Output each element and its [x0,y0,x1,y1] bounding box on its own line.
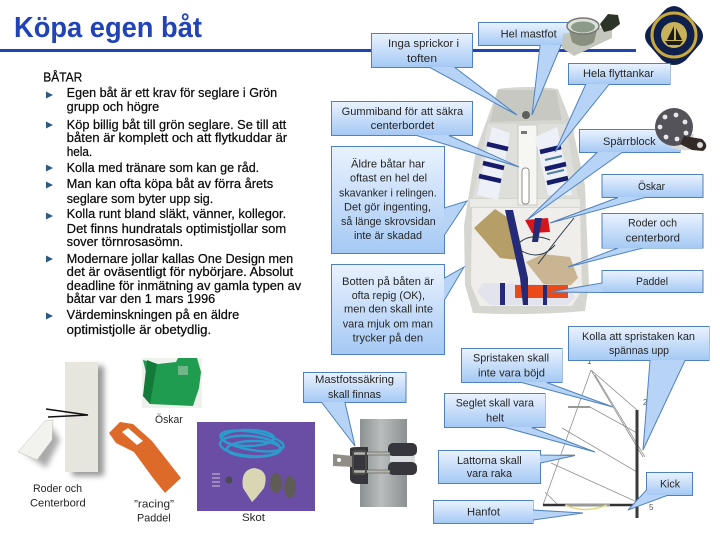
callout: Inga sprickor i toften: Inga sprickor i [388,38,459,50]
heading: BÅTAR [43,70,82,84]
caption: Öskar: Öskar [155,414,183,426]
bullet text: Värdeminskningen på en äldre [67,308,239,322]
callout: Spärrblock: Spärrblock [603,136,656,148]
callout: Inga sprickor i toften: toften [407,53,437,65]
left flotation bag [477,127,510,200]
caption: Skot: Skot [242,512,265,524]
caption: racing Paddel: ”racing” [134,499,174,511]
bullet text: hela. [67,145,92,159]
text block: BÅTAR [43,70,302,337]
callout: Hel mastfot [478,22,575,115]
callout: Seglet [444,394,595,452]
callout: Botten: ofta repig (OK), [352,290,425,302]
callout: Seglet: Seglet skall vara [456,398,535,410]
sail numbers: 2 [643,398,648,407]
callout: Botten: trycker på den [353,333,423,345]
ropes [518,218,574,264]
callout: Mastfotssäkring [304,372,406,446]
title: Köpa egen båt [14,12,202,44]
photo: sheet and fittings [197,422,315,511]
bullet text: optimistjolle är obetydlig. [67,323,211,337]
bullet text: deadline för inmätning av gamla typen av [67,279,302,293]
callout: Hanfot: Hanfot [467,507,500,519]
callout: Lattorna: Lattorna skall [457,455,522,467]
sail numbers: 1 [587,357,592,366]
callout: Gummiband: centerbordet [371,120,434,132]
icon: mast foot [562,14,620,56]
callout: Seglet: helt [486,413,504,425]
callout: Hel mastfot: Hel mastfot [501,29,557,41]
callout: Gummiband: Gummiband för att säkra [342,106,464,118]
caption: Roder och Centerbord: Centerbord [30,498,86,510]
callout: Roder och centerbord: Roder och [628,218,677,230]
callout: Kolla att spristaken [568,326,709,450]
callout: Spristaken: Spristaken skall [473,353,549,365]
centerboard case [518,125,537,205]
caption: racing Paddel: Paddel [137,513,171,525]
callout: Paddel [550,270,703,292]
bag [526,254,578,286]
bullets [46,92,53,320]
icon: ratchet block [655,108,706,151]
callout: Hela flyttankar [555,64,670,152]
photo: rudder and centerboard [18,362,104,476]
callout: Äldre båtar: så länge skrovsidan [341,216,436,228]
callout: Kick: Kick [660,479,680,491]
callout: Kick [628,472,692,510]
bullet text: sover törnrosasömn. [67,235,183,249]
callout: Inga sprickor i toften [372,34,517,115]
sail numbers [587,357,654,512]
mast hole [522,111,530,119]
bullet text: Det finns hundratals optimistjollar som [67,222,286,236]
callout: Lattorna [438,450,575,484]
caption: racing Paddel [134,499,174,525]
bullet text: båtar var den 1 mars 1996 [67,292,215,306]
callout: Roder och centerbord: centerbord [626,233,680,245]
bullet text: Kolla runt bland släkt, vänner, kollegor. [67,207,286,221]
callout: Mastfotssäkring: skall finnas [328,389,381,401]
photo: green bailer [142,358,202,408]
callout: Gummiband [332,102,519,167]
boat photo [464,87,589,314]
bullet text: Köp billig båt till grön seglare. Se till att [67,118,287,132]
orange paddle [515,285,568,298]
sail numbers: 5 [649,503,654,512]
callout: Äldre båtar [332,146,467,254]
caption: Roder och Centerbord [30,483,86,510]
callout: Spärrblock [527,130,680,220]
bullet text: Man kan ofta köpa båt av förra årets [67,177,273,191]
bottom float [477,283,575,305]
photo: mast clamp [333,419,417,507]
callout: Äldre båtar: oftast en hel del [350,173,427,185]
callout: Roder och centerbord [568,214,703,267]
sail diagram [543,357,654,518]
bullet text: Egen båt är ett krav för seglare i Grön [67,86,277,100]
bullet text: seglare som byter upp sig. [67,192,213,206]
bullet text [67,86,302,337]
callout: Kolla att spristaken: spännas upp [609,345,669,357]
bullet text: det är oväsentligt för nybörjare. Absolut [67,265,294,279]
callout: Mastfotssäkring: Mastfotssäkring [315,374,394,386]
callout: Paddel: Paddel [636,276,668,288]
callout: Äldre båtar: inte är skadad [354,230,422,242]
callout: Botten: men den skall inte [344,304,433,316]
boom [543,504,637,506]
red bailer [525,218,550,233]
callout: Spristaken: inte vara böjd [478,368,545,380]
callout: Botten [332,264,464,354]
callout: Botten: Botten på båten är [342,276,434,288]
right flotation bag [535,127,572,195]
callout: Kolla att spristaken: Kolla att spristaken kan [582,331,695,343]
callout: Äldre båtar: Äldre båtar har [351,159,425,171]
callout: Äldre båtar: Det gör ingenting, [344,202,431,214]
callout: Spristaken [462,348,613,407]
straps [500,210,547,305]
callout: Öskar: Öskar [638,181,665,193]
callout: Hanfot [434,500,583,524]
bullet text: Kolla med tränare som kan ge råd. [67,161,259,175]
callout: Botten: vara mjuk om man [343,319,433,331]
callout: Lattorna: vara raka [467,468,513,480]
bullet text: båten är komplett och att flytkuddar är [67,131,287,145]
callout: Äldre båtar: skavanker i relingen. [339,188,437,200]
mast [636,410,638,518]
bullet text: Modernare jollar kallas One Design men [67,252,293,266]
caption: Roder och Centerbord: Roder och [33,483,82,495]
bullet text: grupp och högre [67,100,159,114]
photo: orange paddle [109,422,181,493]
logo [645,6,703,65]
sponge net [474,209,518,260]
callout: Öskar [550,174,703,223]
title rule [0,49,636,52]
callout: Hela flyttankar: Hela flyttankar [583,68,654,80]
